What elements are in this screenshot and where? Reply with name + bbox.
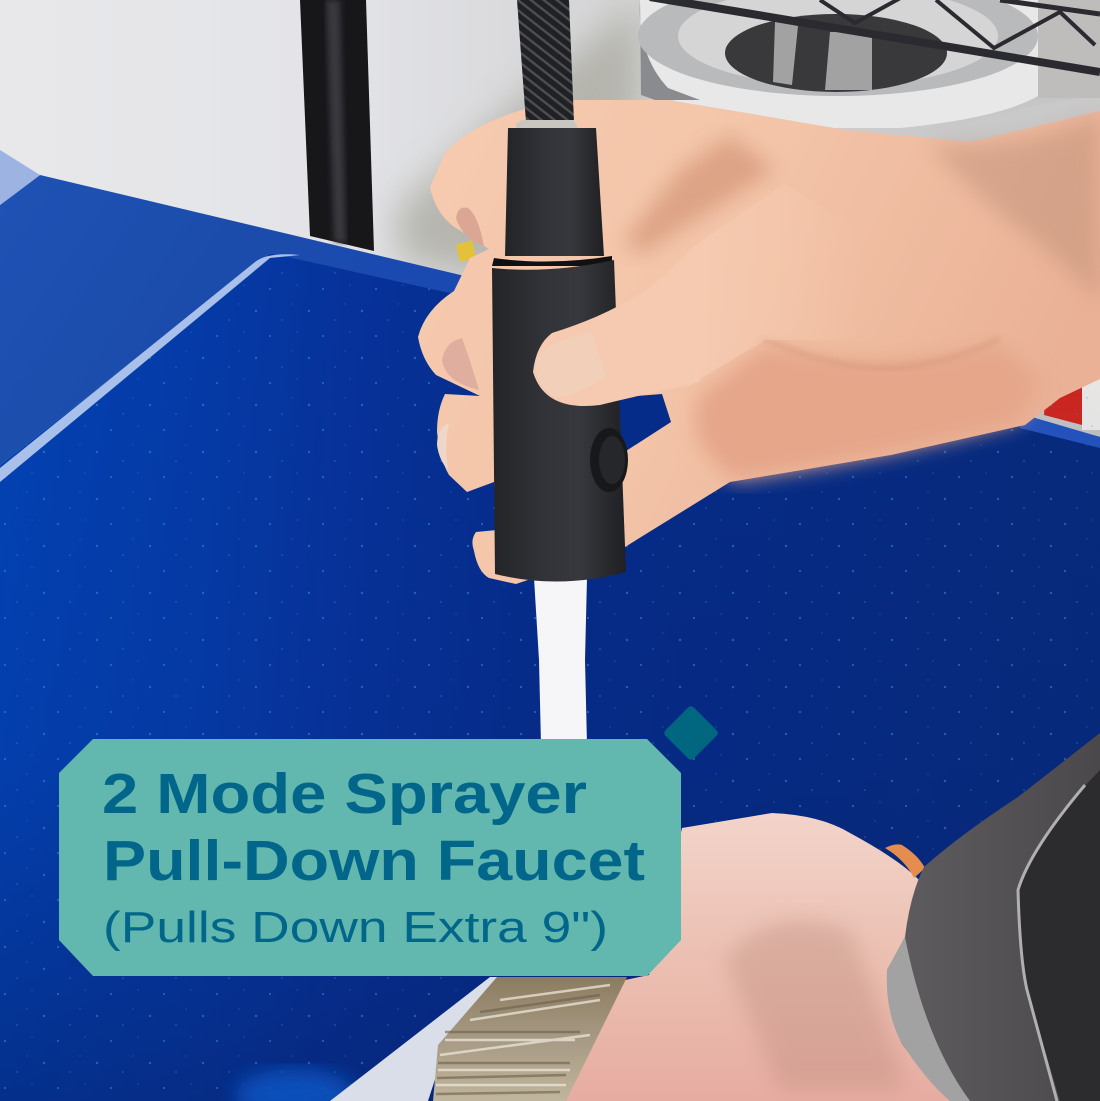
headline line 1: 2 Mode Sprayer [102,762,587,826]
bright patch on floor [235,1069,355,1101]
sink basin [0,253,1100,1101]
sleeve dark interior [1018,770,1100,1101]
palm shading below thumb [695,345,1040,480]
headline line 2: Pull-Down Faucet [103,829,645,893]
metal ring [516,120,578,128]
grey sleeve [887,733,1100,1101]
basin lower shade [0,250,1100,1101]
blue gap between palm and sprayer [612,394,671,451]
label panel [59,739,681,976]
orange fleck near lower hand [885,844,925,878]
sleeve cuff edge [887,937,970,1101]
sink rim [0,175,490,465]
upper hand: palm and back of hand [418,100,1100,584]
arm hair shading [930,115,1100,300]
sprayer head [492,120,628,582]
button [590,428,628,492]
shadow near wall corner [395,0,640,280]
background: white wall [0,0,1100,480]
paint brush bristles [433,977,627,1101]
hose braided [517,0,574,122]
wire shelf [650,0,1100,72]
diamond accent [663,705,719,761]
gap shadow [492,256,612,266]
yellow object behind fingers [456,240,476,262]
label background [59,739,681,976]
lower hand hair shading [725,920,905,1090]
index finger nail [456,207,484,246]
rim: pale cloth corner [0,150,40,205]
thumb base fading into hand [690,184,860,385]
upper collar [505,128,604,256]
thumb tip [533,243,700,406]
lower body [492,260,626,582]
rim: right edge [1020,417,1100,448]
silver object behind wrist [960,96,1100,150]
paint brush handle [330,977,512,1101]
thumbnail [535,332,606,398]
water stream [534,578,587,745]
palm crease under thumb [762,338,1000,368]
subheading: (Pulls Down Extra 9") [103,903,608,952]
basin speckles [0,270,1100,1101]
rim highlight [0,254,300,482]
black shelf pole [300,0,374,251]
paint can [638,0,1038,128]
web shadow beside index finger [625,135,775,255]
right side shelf items [1038,0,1100,430]
middle finger nail [442,338,479,390]
lower hand [566,813,1000,1101]
ring finger nail [437,423,449,470]
sleeve seam [1018,785,1085,1101]
